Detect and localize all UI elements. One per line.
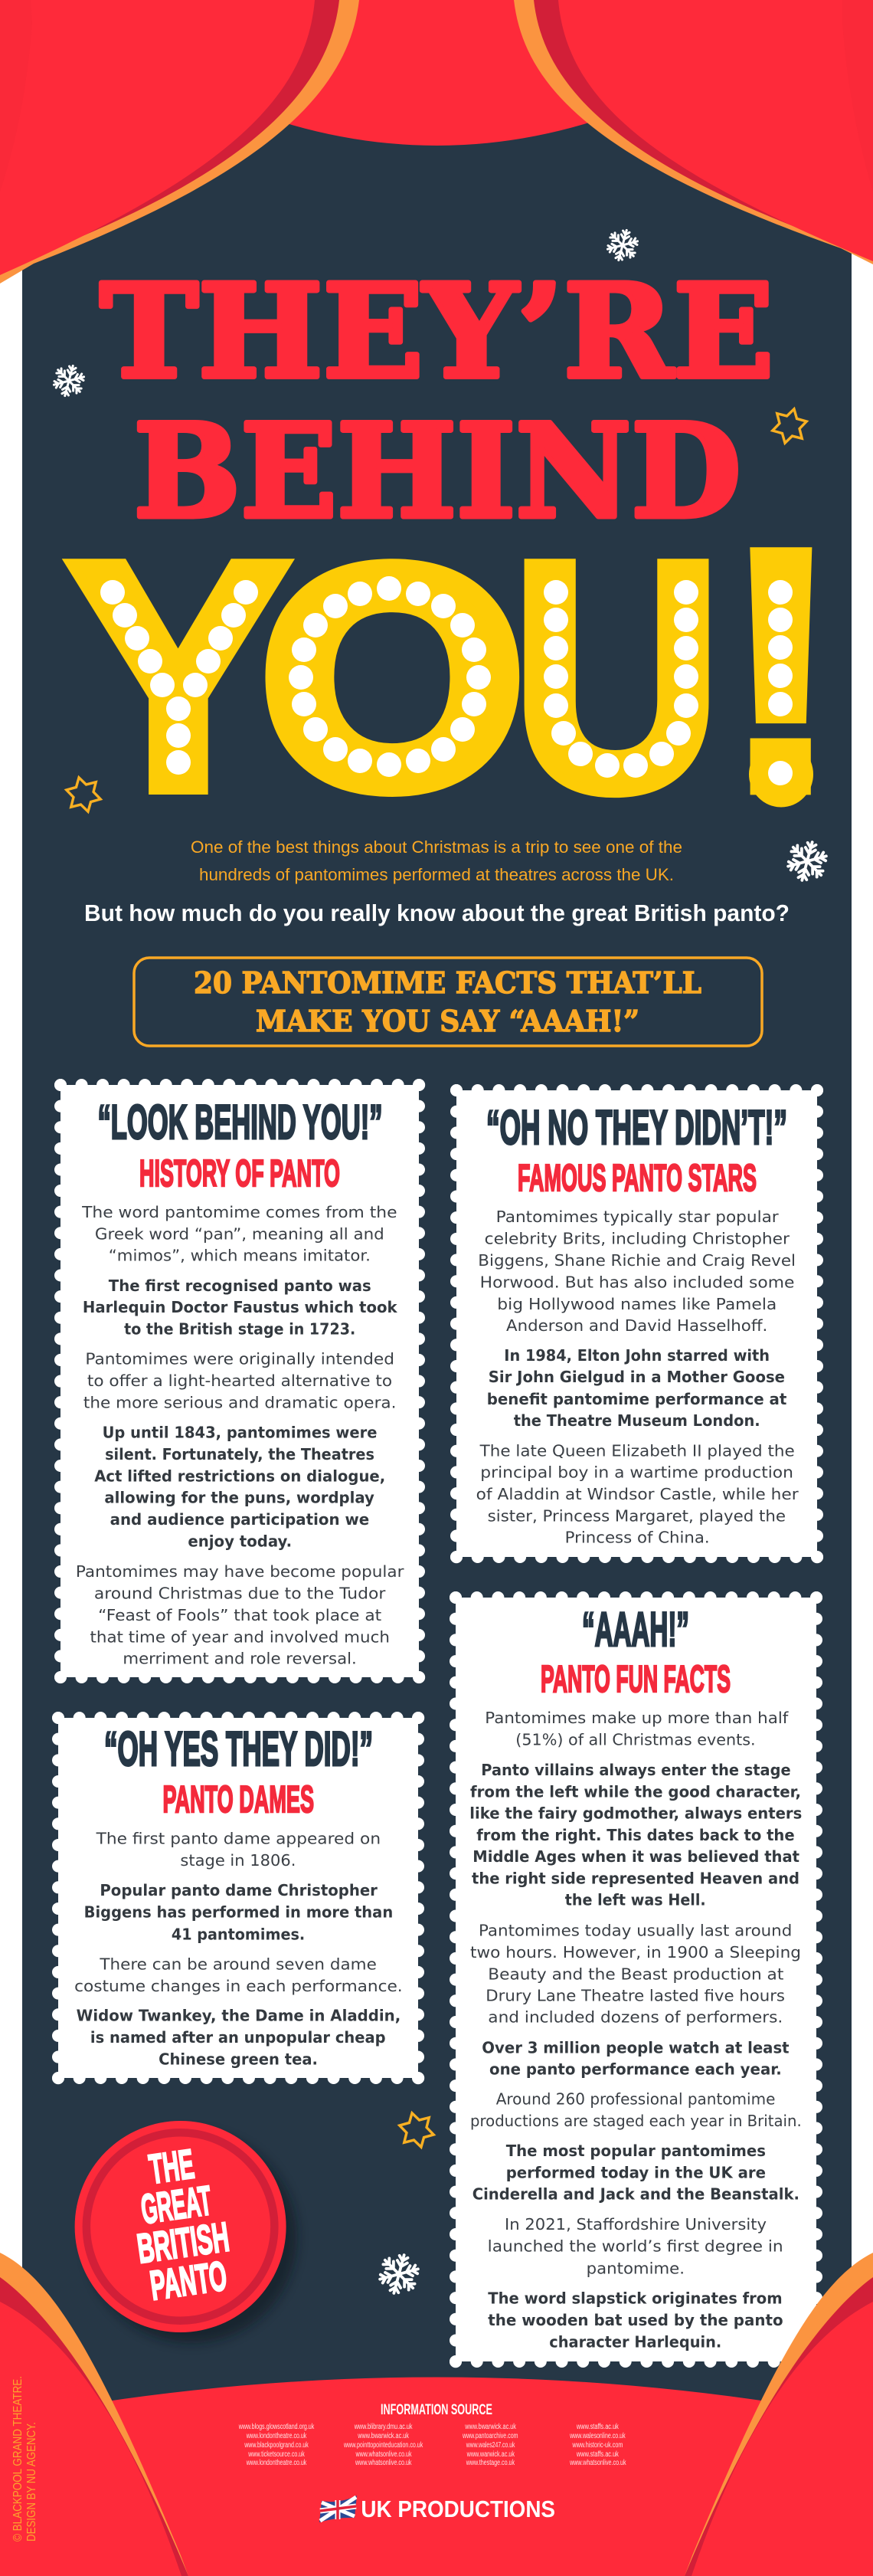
information source links: www.pointtopointeducation.co.uk (343, 2441, 423, 2450)
body text: Biggens, Shane Richie and Craig Revel (478, 1251, 796, 1270)
body text: costume changes in each performance. (74, 1977, 403, 1995)
body text: from the right. This dates back to the (476, 1826, 795, 1844)
body text: In 2021, Staffordshire University (505, 2215, 767, 2234)
body text: around Christmas due to the Tudor (94, 1585, 386, 1603)
body text: Greek word “pan”, meaning all and (95, 1224, 384, 1243)
body text: Around 260 professional pantomime (496, 2090, 775, 2109)
body text: Drury Lane Theatre lasted five hours (486, 1986, 785, 2004)
badge: the great british panto: GREAT (138, 2178, 214, 2233)
information source links: www.blogs.glowscotland.org.uk (238, 2423, 315, 2431)
body text: Pantomimes today usually last around (479, 1922, 792, 1940)
body text: Act lifted restrictions on dialogue, (94, 1467, 385, 1485)
badge: the great british panto: THE (146, 2141, 197, 2193)
body text: two hours. However, in 1900 a Sleeping (470, 1943, 801, 1961)
panel: panto fun facts (456, 1598, 816, 2361)
information source links: www.whatsonlive.co.uk (355, 2459, 412, 2467)
body text: like the fairy godmother, always enters (469, 1804, 802, 1822)
panel: famous panto stars (456, 1090, 818, 1557)
body text: Popular panto dame Christopher (100, 1881, 378, 1899)
body text: “mimos”, which means imitator. (109, 1247, 371, 1265)
title: They're Behind (100, 256, 773, 547)
icon: snowflake top (603, 226, 642, 264)
information source links: www.historic-uk.com (572, 2441, 623, 2450)
body text: Princess of China. (565, 1529, 710, 1547)
information source links: www.bwarwick.ac.uk (358, 2432, 410, 2440)
body text: “Feast of Fools” that took place at (98, 1606, 381, 1624)
body text: Anderson and David Hasselhoff. (506, 1316, 767, 1335)
icon: snowflake right (783, 837, 831, 886)
body text: Middle Ages when it was believed that (472, 1847, 799, 1866)
body text: stage in 1806. (180, 1851, 296, 1870)
information source links: www.blibrary.dmu.ac.uk (354, 2423, 413, 2431)
body text: merriment and role reversal. (123, 1650, 357, 1668)
title: YOU! with light bulbs: Y (66, 493, 290, 859)
title: YOU! with light bulbs: ! (723, 478, 839, 862)
information source links: www.wales247.co.uk (466, 2441, 515, 2450)
information source links: www.thestage.co.uk (466, 2459, 515, 2467)
callout: 20 pantomime facts: 20 PANTOMIME FACTS THAT’LL (194, 965, 701, 1000)
information source heading: INFORMATION SOURCE (381, 2402, 492, 2418)
body text: silent. Fortunately, the Theatres (105, 1445, 374, 1463)
body text: is named after an unpopular cheap (90, 2028, 386, 2047)
icon: star bottom (397, 2109, 436, 2151)
body text: the more serious and dramatic opera. (83, 1393, 397, 1411)
body text: Pantomimes may have become popular (76, 1562, 404, 1581)
heading: “OH YES THEY DID!” (104, 1722, 373, 1776)
body text: character Harlequin. (549, 2332, 721, 2351)
body text: Pantomimes make up more than half (485, 1709, 789, 1727)
body text: pantomime. (587, 2259, 685, 2277)
intro question: But how much do you really know about the great British panto? (84, 900, 790, 926)
icon: star right (770, 405, 809, 447)
body text: The late Queen Elizabeth II played the (479, 1442, 795, 1460)
icon: snowflake left (50, 362, 88, 400)
information source links (238, 2423, 626, 2467)
panel: panto dames (58, 1718, 418, 2078)
intro text: One of the best things about Christmas is a trip to see one of the (191, 837, 682, 857)
body text: Harlequin Doctor Faustus which took (83, 1298, 398, 1316)
body text: Biggens has performed in more than (84, 1903, 393, 1921)
body text: one panto performance each year. (489, 2060, 782, 2079)
body text: of Aladdin at Windsor Castle, while her (476, 1485, 799, 1503)
body text: The word pantomime comes from the (81, 1203, 397, 1221)
information source links: www.walesonline.co.uk (569, 2432, 626, 2440)
body text: Up until 1843, pantomimes were (103, 1424, 377, 1442)
credit line: DESIGN BY NU AGENCY. (25, 2422, 38, 2542)
body text: the wooden bat used by the panto (488, 2311, 783, 2329)
information source links: www.staffs.ac.uk (576, 2450, 620, 2459)
body text: Over 3 million people watch at least (482, 2039, 790, 2057)
body text (74, 1829, 403, 2069)
body text: that time of year and involved much (90, 1627, 390, 1646)
body text: 41 pantomimes. (172, 1925, 305, 1943)
body text: Cinderella and Jack and the Beanstalk. (472, 2185, 799, 2204)
badge: the great british panto (75, 2121, 297, 2343)
body text: The most popular pantomimes (506, 2142, 766, 2160)
information source links: www.warwick.ac.uk (466, 2450, 515, 2459)
intro text: hundreds of pantomimes performed at theatres across the UK. (199, 865, 674, 884)
information source links: www.londontheatre.co.uk (246, 2432, 307, 2440)
bottom stage and curtains (0, 2253, 873, 2576)
information source links: www.ticketsource.co.uk (247, 2450, 305, 2459)
body text: the right side represented Heaven and (472, 1869, 799, 1887)
information source links: www.whatsonlive.co.uk (355, 2450, 412, 2459)
panel: history of panto (60, 1085, 420, 1678)
body text: launched the world’s first degree in (488, 2237, 783, 2255)
body text: to offer a light-hearted alternative to (87, 1372, 392, 1390)
body text: Sir John Gielgud in a Mother Goose (489, 1368, 785, 1386)
body text: productions are staged each year in Britain. (470, 2112, 802, 2130)
body text (476, 1208, 799, 1547)
body text: There can be around seven dame (99, 1955, 377, 1973)
icon: star left (64, 774, 103, 815)
information source links: www.whatsonlive.co.uk (569, 2459, 626, 2467)
information source links: www.pantoarchive.com (462, 2432, 518, 2440)
body text: celebrity Brits, including Christopher (485, 1229, 790, 1247)
body text: to the British stage in 1723. (124, 1320, 355, 1339)
subheading: PANTO DAMES (162, 1779, 314, 1821)
body text: Horwood. But has also included some (480, 1273, 794, 1292)
body text: Chinese green tea. (159, 2050, 318, 2069)
title: They're Behind: THEY’RE (100, 256, 773, 408)
body text: Panto villains always enter the stage (481, 1761, 791, 1779)
icon: snowflake bottom (375, 2250, 423, 2299)
information source links: www.bwarwick.ac.uk (465, 2423, 517, 2431)
body text: Pantomimes were originally intended (85, 1350, 394, 1368)
body text: The word slapstick originates from (488, 2289, 783, 2308)
information source links: www.staffs.ac.uk (576, 2423, 620, 2431)
body text: Widow Twankey, the Dame in Aladdin, (77, 2006, 401, 2024)
body text: from the left while the good character, (470, 1782, 801, 1801)
title: YOU! with light bulbs (66, 478, 839, 862)
body text: Pantomimes typically star popular (496, 1208, 779, 1226)
badge: the great british panto: BRITISH (135, 2214, 232, 2273)
callout: 20 pantomime facts (134, 958, 762, 1046)
body text: the left was Hell. (565, 1891, 706, 1909)
body text: enjoy today. (188, 1532, 292, 1551)
logo: UK Productions: UK PRODUCTIONS (361, 2496, 555, 2522)
body text: and included dozens of performers. (488, 2008, 783, 2027)
top curtains (0, 0, 873, 283)
heading: “AAAH!” (582, 1603, 689, 1657)
information source links: www.londontheatre.co.uk (246, 2459, 307, 2467)
body text: the Theatre Museum London. (514, 1411, 760, 1430)
heading: “LOOK BEHIND YOU!” (98, 1096, 383, 1149)
callout: 20 pantomime facts: MAKE YOU SAY “AAAH!” (256, 1004, 639, 1038)
body text: allowing for the puns, wordplay (104, 1489, 374, 1507)
title: They're Behind: BEHIND (133, 395, 741, 547)
body text: The first recognised panto was (109, 1277, 371, 1295)
title: YOU! with light bulbs: O (262, 503, 524, 850)
body text: In 1984, Elton John starred with (504, 1346, 770, 1365)
body text: big Hollywood names like Pamela (497, 1295, 777, 1313)
subheading: HISTORY OF PANTO (139, 1153, 340, 1195)
body text: principal boy in a wartime production (480, 1463, 793, 1482)
title: YOU! with light bulbs: U (512, 493, 721, 859)
body text (76, 1203, 404, 1668)
intro text (191, 837, 682, 884)
body text: The first panto dame appeared on (96, 1829, 381, 1847)
credit line: © BLACKPOOL GRAND THEATRE. (11, 2376, 25, 2542)
credit line (11, 2376, 38, 2542)
body text: performed today in the UK are (506, 2163, 766, 2181)
body text: sister, Princess Margaret, played the (488, 1506, 786, 1525)
body text: (51%) of all Christmas events. (515, 1730, 756, 1748)
information source links: www.blackpoolgrand.co.uk (244, 2441, 309, 2450)
body text: benefit pantomime performance at (487, 1390, 787, 1408)
badge: the great british panto: PANTO (147, 2253, 230, 2309)
body text: and audience participation we (110, 1510, 369, 1529)
body text: Beauty and the Beast production at (488, 1965, 783, 1983)
body text (469, 1709, 802, 2351)
